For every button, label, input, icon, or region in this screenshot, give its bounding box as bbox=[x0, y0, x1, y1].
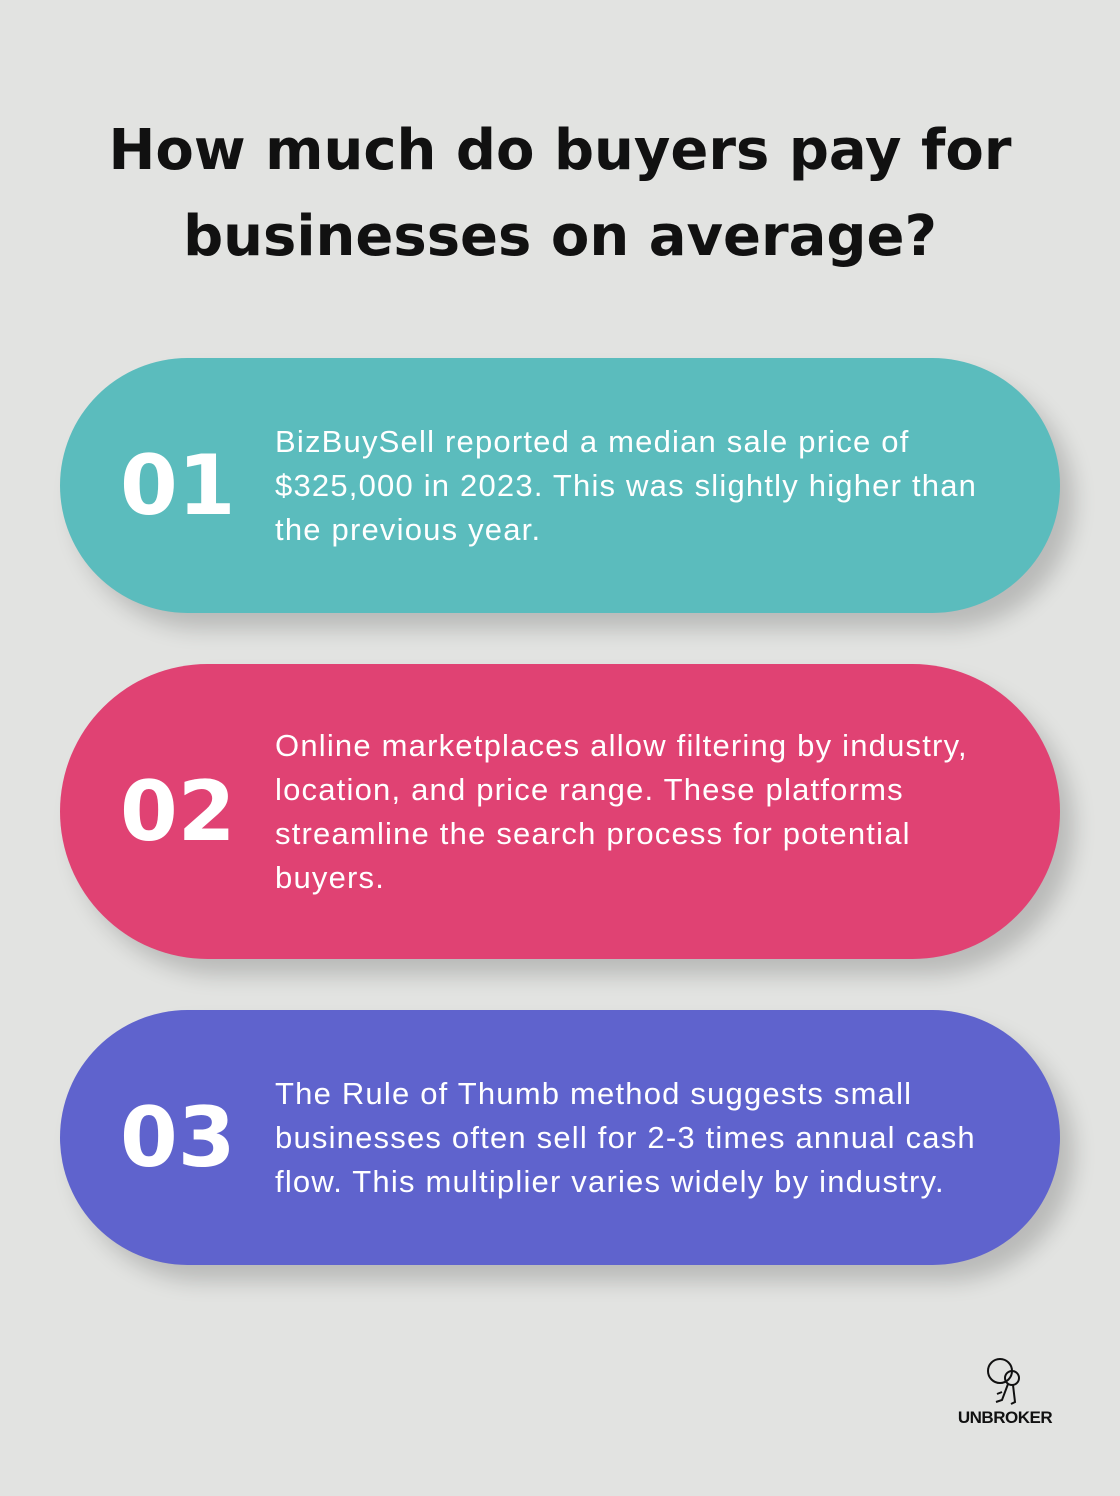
text 02 bbox=[275, 728, 968, 895]
number 02: 02 bbox=[120, 763, 236, 860]
text 03: businesses often sell for 2-3 times annual cash bbox=[275, 1120, 976, 1155]
text 03: flow. This multiplier varies widely by industry. bbox=[275, 1164, 945, 1199]
panel: card 03 bbox=[60, 1010, 1060, 1265]
text 03: The Rule of Thumb method suggests small bbox=[275, 1076, 912, 1111]
text 02: Online marketplaces allow filtering by industry, bbox=[275, 728, 968, 763]
text 01: the previous year. bbox=[275, 512, 541, 547]
text 01: BizBuySell reported a median sale price of bbox=[275, 424, 910, 459]
text 01 bbox=[275, 424, 977, 547]
title bbox=[109, 118, 1012, 269]
logo text: UNBROKER bbox=[958, 1408, 1052, 1427]
text 01: $325,000 in 2023. This was slightly higher than bbox=[275, 468, 977, 503]
panel: card 02 bbox=[60, 664, 1060, 959]
title: How much do buyers pay for bbox=[109, 118, 1011, 183]
text 02: buyers. bbox=[275, 860, 385, 895]
text 02: location, and price range. These platforms bbox=[275, 772, 904, 807]
panel: card 01 bbox=[60, 358, 1060, 613]
icon: keys bbox=[987, 1358, 1020, 1405]
number 01: 01 bbox=[120, 437, 236, 534]
logo: unbroker bbox=[958, 1358, 1052, 1427]
text 03 bbox=[275, 1076, 976, 1199]
number 03: 03 bbox=[120, 1089, 236, 1186]
text 02: streamline the search process for potential bbox=[275, 816, 911, 851]
title: businesses on average? bbox=[183, 204, 937, 269]
